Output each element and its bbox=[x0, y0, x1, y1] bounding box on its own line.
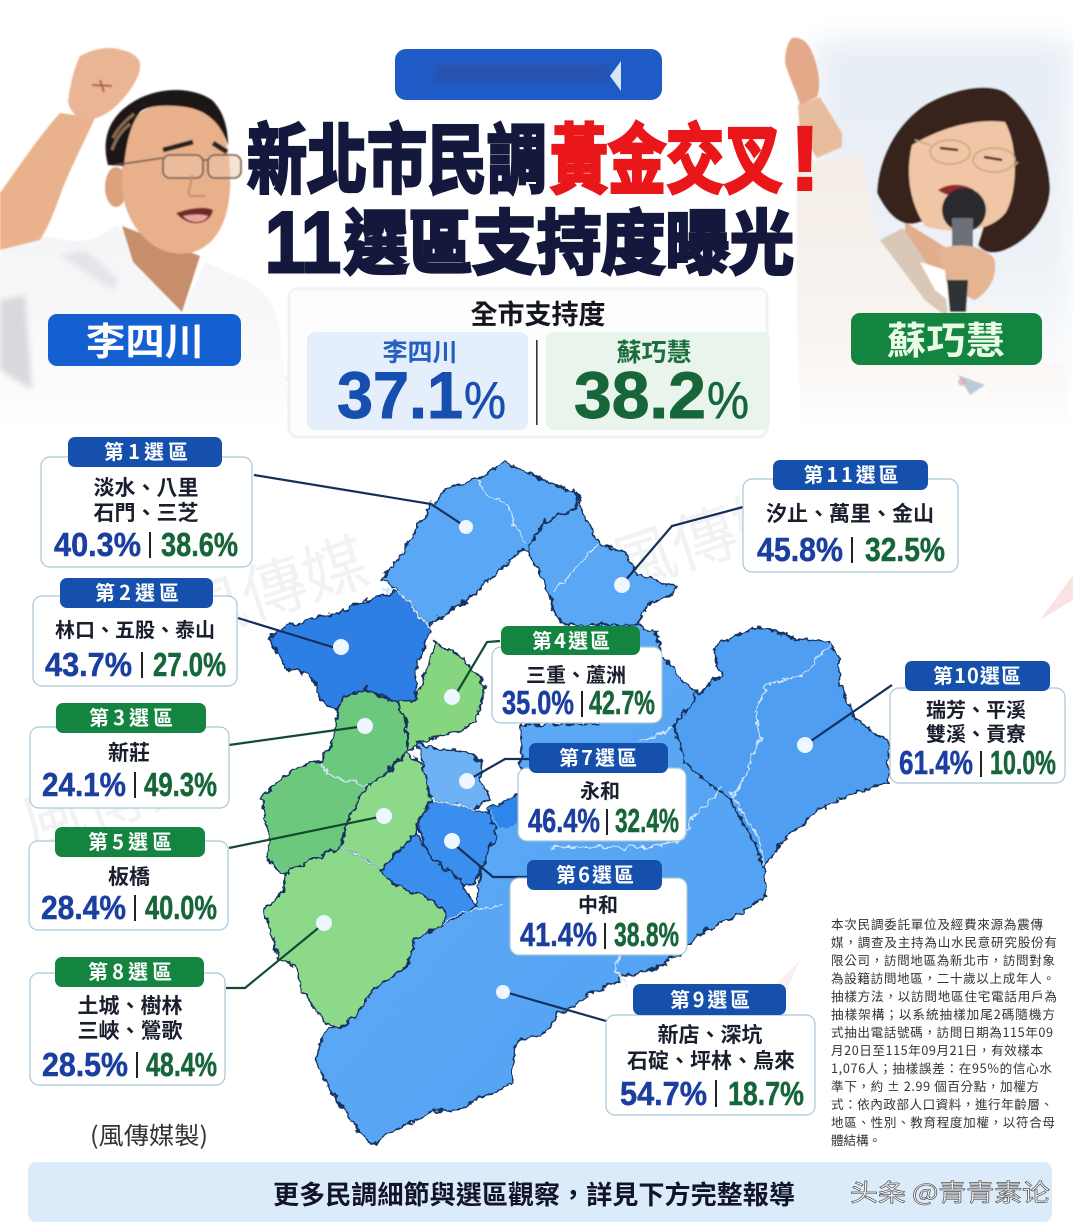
card: district 1: 38.6% bbox=[161, 526, 238, 563]
methodology note: 抽樣方法，以訪問地區住宅電話用戶為 bbox=[831, 986, 1057, 1005]
methodology note: 式：依內政部人口資料，進行年齡層、 bbox=[831, 1094, 1053, 1113]
card: district 5: 板橋 bbox=[108, 861, 150, 891]
card: district 6: 38.8% bbox=[614, 916, 679, 953]
蘇巧慧 box bbox=[546, 332, 770, 430]
李四川 label: 李四川 bbox=[382, 333, 458, 369]
district 11 bbox=[527, 495, 676, 625]
title line 1 red: 黃金交叉 bbox=[550, 99, 782, 209]
title line 1 dark: 新北市民調 bbox=[247, 99, 547, 209]
card: district 11: 汐止、萬里、金山 bbox=[766, 498, 934, 528]
district 2 bbox=[268, 592, 429, 713]
credit: (風傳媒製) bbox=[90, 1116, 208, 1151]
methodology note bbox=[831, 914, 1057, 1149]
watermark layer: 風傳媒 bbox=[597, 461, 808, 608]
eyes bbox=[940, 148, 1002, 160]
card: district 8: 土城、樹林 bbox=[78, 990, 182, 1020]
methodology note: 限公司，訪問地區為新北市，訪問對象 bbox=[831, 950, 1055, 969]
inner dark block bbox=[488, 797, 521, 827]
watermark layer: 風傳媒 bbox=[167, 511, 378, 658]
district 4 bbox=[399, 643, 486, 750]
card: district 7: 永和 bbox=[580, 775, 620, 804]
methodology note: 式抽出電話號碼，訪問日期為115年09 bbox=[831, 1022, 1053, 1041]
methodology note: 本次民調委託單位及經費來源為震傳 bbox=[831, 914, 1043, 933]
card: district 1: 第1選區 bbox=[104, 436, 188, 465]
card: district 9: 新店、深坑 bbox=[658, 1019, 762, 1049]
watermark layer: 風傳媒 bbox=[7, 721, 218, 868]
district 1 bbox=[380, 462, 578, 627]
mouth bbox=[938, 185, 974, 196]
platform watermark: 头条 @青青素论 bbox=[850, 1173, 1050, 1208]
face bbox=[909, 121, 1015, 231]
methodology note: 體結構。 bbox=[831, 1130, 881, 1149]
top banner (blurred) bbox=[395, 49, 662, 100]
footer banner bbox=[28, 1162, 1052, 1222]
card: district 1 bbox=[41, 436, 252, 567]
card: district 9: 18.7% bbox=[728, 1075, 804, 1112]
portrait: 李四川 bbox=[0, 48, 288, 432]
card: district 10: 瑞芳、平溪 bbox=[926, 694, 1026, 723]
watermark layer bbox=[7, 281, 1073, 1030]
card: district 6: 第6選區 bbox=[556, 859, 634, 888]
watermark layer: 風傳媒 bbox=[262, 301, 473, 448]
internal white boundaries bbox=[321, 480, 831, 986]
ear bbox=[105, 167, 127, 207]
card: district 2: 第2選區 bbox=[95, 577, 179, 606]
李四川 value: 37.1 bbox=[337, 358, 463, 432]
card: district 8: 48.4% bbox=[146, 1046, 217, 1083]
card: district 10: 61.4% bbox=[899, 744, 973, 781]
card: district 9 bbox=[606, 984, 815, 1115]
district 3 bbox=[262, 689, 409, 874]
card: district 8: 28.5% bbox=[42, 1046, 128, 1083]
exclamation: ! bbox=[790, 108, 820, 210]
card: district 9: 54.7% bbox=[620, 1075, 707, 1112]
panel heading: 全市支持度 bbox=[470, 293, 606, 332]
name tag: 蘇巧慧 bbox=[851, 310, 1042, 365]
card: district 8 bbox=[30, 956, 225, 1085]
neck bbox=[122, 226, 200, 312]
hand bbox=[785, 38, 819, 105]
panel: citywide support bbox=[289, 289, 770, 437]
arm bbox=[798, 97, 842, 158]
methodology note: 月20日至115年09月21日，有效樣本 bbox=[831, 1040, 1043, 1059]
card: district 1: 淡水、八里 bbox=[94, 472, 198, 502]
mic body bbox=[952, 218, 973, 264]
methodology note: 地區、性別、教育程度加權，以符合母 bbox=[831, 1112, 1055, 1131]
card: district 5: 28.4% bbox=[41, 889, 126, 926]
methodology note: 1,076人；抽樣誤差：在95%的信心水 bbox=[831, 1058, 1052, 1077]
district 6 bbox=[417, 801, 499, 889]
card: district 10: 雙溪、貢寮 bbox=[926, 718, 1026, 747]
card: district 11: 45.8% bbox=[757, 531, 843, 568]
hair bbox=[877, 88, 1050, 253]
card: district 4: 三重、蘆洲 bbox=[526, 659, 626, 688]
face bbox=[122, 103, 230, 254]
card: district 3: 第3選區 bbox=[89, 702, 173, 731]
brows bbox=[163, 142, 227, 152]
card: district 3: 49.3% bbox=[144, 766, 217, 803]
card: district 8: 第8選區 bbox=[88, 956, 172, 985]
card: district 6: 中和 bbox=[578, 889, 618, 918]
hand on mic bbox=[936, 245, 995, 300]
card: district 1: 40.3% bbox=[54, 526, 141, 563]
sky bbox=[815, 40, 1073, 420]
mouth bbox=[176, 208, 213, 223]
district 10 bbox=[674, 627, 888, 865]
card: district 2: 43.7% bbox=[45, 646, 132, 683]
card: district 9: 第9選區 bbox=[670, 984, 750, 1013]
panel: citywide support: % bbox=[707, 372, 749, 430]
neck bbox=[905, 222, 965, 292]
李四川 box bbox=[307, 332, 528, 430]
leader lines and dots bbox=[226, 475, 892, 1021]
collar bbox=[880, 228, 948, 318]
name tag: 李四川: 李四川 bbox=[86, 311, 204, 366]
card: district 1: 石門、三芝 bbox=[94, 497, 198, 527]
card: district 4 bbox=[492, 625, 662, 723]
glasses bbox=[115, 155, 241, 178]
portrait: 蘇巧慧 bbox=[785, 38, 1073, 432]
card: district 2: 林口、五股、泰山 bbox=[55, 614, 215, 643]
fist bbox=[68, 48, 140, 120]
card: district 2: 27.0% bbox=[153, 646, 226, 683]
card: district 5: 40.0% bbox=[145, 889, 217, 926]
district 9 bbox=[315, 625, 766, 1144]
card: district 10 bbox=[890, 660, 1065, 783]
card: district 11 bbox=[743, 459, 958, 572]
methodology note: 媒，調查及主持為山水民意研究股份有 bbox=[831, 932, 1057, 951]
hair bbox=[106, 90, 228, 166]
title bbox=[247, 99, 820, 291]
arm bbox=[0, 113, 95, 250]
card: district 4: 35.0% bbox=[502, 684, 574, 721]
title line 2 text: 選區支持度曝光 bbox=[344, 188, 794, 289]
methodology note: 抽樣架構；以系統抽樣加尾2碼隨機方 bbox=[831, 1004, 1055, 1023]
card: district 11: 第11選區 bbox=[804, 459, 898, 488]
card: district 3 bbox=[30, 702, 229, 808]
district 8 bbox=[264, 847, 446, 1028]
card: district 6 bbox=[510, 859, 687, 955]
card: district 8: 三峽、鶯歌 bbox=[78, 1015, 182, 1045]
card: district 3: 新莊 bbox=[108, 737, 150, 767]
card: district 11: 32.5% bbox=[865, 531, 945, 568]
methodology note: 為設籍訪問地區，二十歲以上成年人。 bbox=[831, 968, 1055, 987]
card: district 9: 石碇、坪林、烏來 bbox=[627, 1045, 795, 1075]
card: district 3: 24.1% bbox=[42, 766, 126, 803]
card: district 7 bbox=[518, 742, 686, 841]
蘇巧慧 value: 38.2 bbox=[574, 358, 706, 432]
蘇巧慧 label: 蘇巧慧 bbox=[616, 333, 692, 369]
panel: citywide support: % bbox=[464, 372, 506, 430]
glasses bbox=[915, 140, 1018, 172]
divider bbox=[536, 340, 538, 425]
card: district 5: 第5選區 bbox=[88, 826, 172, 855]
title line 2 digits: 11 bbox=[265, 195, 341, 291]
mic head bbox=[942, 188, 986, 232]
shirt bbox=[0, 226, 288, 432]
card: district 5 bbox=[29, 826, 228, 930]
footer banner: 更多民調細節與選區觀察，詳見下方完整報導 bbox=[273, 1175, 795, 1212]
collar pin bbox=[958, 375, 985, 395]
nose bbox=[189, 175, 205, 196]
map of districts bbox=[262, 462, 888, 1144]
district 7 bbox=[417, 742, 491, 810]
card: district 6: 41.4% bbox=[520, 916, 597, 953]
card: district 7: 第7選區 bbox=[559, 742, 637, 771]
card: district 7: 46.4% bbox=[528, 802, 600, 839]
jacket bbox=[797, 155, 1073, 432]
card: district 4: 42.7% bbox=[589, 684, 655, 721]
name tag: 蘇巧慧: 蘇巧慧 bbox=[887, 310, 1005, 365]
methodology note: 準下，約 ± 2.99 個百分點，加權方 bbox=[831, 1076, 1039, 1095]
dark wedge bbox=[380, 834, 476, 926]
district 5 bbox=[340, 753, 433, 871]
watermark layer: 風傳媒 bbox=[787, 281, 998, 428]
card: district 10: 第10選區 bbox=[933, 660, 1021, 689]
card: district 7: 32.4% bbox=[615, 802, 679, 839]
card: district 2 bbox=[33, 577, 237, 686]
name tag: 李四川 bbox=[48, 311, 241, 366]
mic handle bbox=[947, 280, 968, 312]
card: district 4: 第4選區 bbox=[532, 625, 610, 654]
